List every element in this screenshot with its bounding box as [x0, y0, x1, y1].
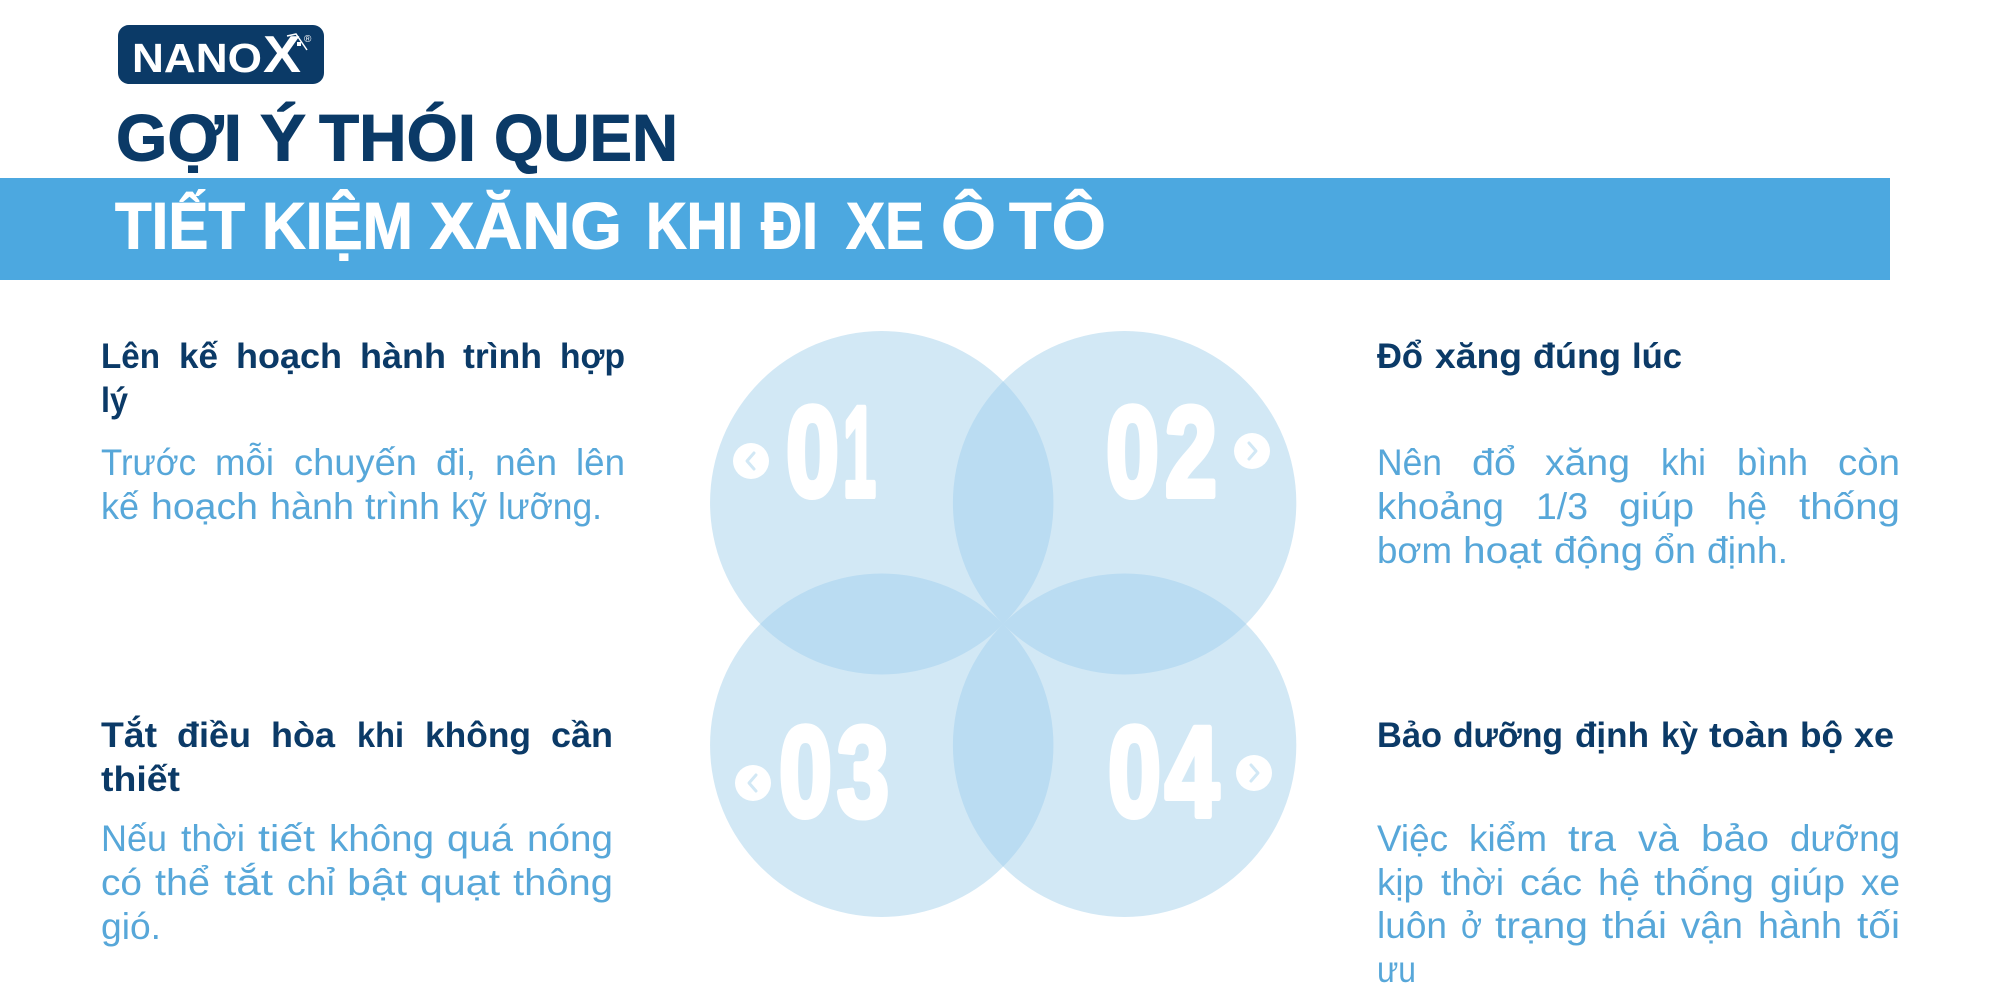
heading: tip 04: định	[1575, 716, 1649, 755]
body text: tip 02: Nên	[1377, 442, 1442, 483]
heading: tip 03	[101, 715, 613, 799]
panel: tip 03	[101, 715, 613, 947]
body text: tip 02: xăng	[1545, 442, 1630, 483]
body text: tip 04: thời	[1441, 862, 1504, 903]
title line 2: KIỆM	[262, 188, 413, 262]
body text: tip 01: mỗi	[215, 442, 274, 483]
body text: tip 04: Việc	[1377, 818, 1448, 859]
number 01: 0	[786, 381, 839, 524]
body text: tip 04: xe	[1861, 862, 1900, 903]
body text: tip 02: định.	[1707, 530, 1788, 571]
body text: tip 01: lên	[576, 442, 625, 483]
title line 2: TÔ	[1009, 188, 1106, 262]
body text: tip 03: chỉ	[287, 862, 335, 903]
number 04: 0	[1108, 701, 1161, 844]
heading: tip 04: kỳ	[1661, 716, 1699, 755]
body text: tip 04: hành	[1758, 905, 1842, 946]
heading: tip 02: đúng	[1533, 337, 1621, 376]
body text: tip 03	[101, 818, 613, 947]
body text: tip 04: ở	[1461, 905, 1482, 946]
body text: tip 04	[1377, 818, 1900, 990]
title line 2: ĐI	[761, 188, 818, 262]
heading: tip 03: thiết	[101, 760, 180, 799]
body text: tip 04: các	[1520, 862, 1582, 903]
body text: tip 03: nóng	[527, 818, 613, 859]
number 04: 4	[1165, 701, 1219, 844]
heading: tip 03: hòa	[271, 716, 336, 755]
title line 1: GỢI	[116, 100, 242, 174]
icon: left arrow 01	[733, 443, 769, 479]
body text: tip 03: quạt	[420, 862, 501, 903]
body text: tip 01: lưỡng.	[498, 486, 602, 527]
heading: tip 04: toàn	[1709, 716, 1789, 755]
body text: tip 04: thái	[1602, 905, 1667, 946]
title line 1: THÓI	[319, 100, 476, 174]
heading: tip 01	[101, 337, 625, 420]
banner	[0, 178, 1890, 280]
heading: tip 02: Đổ	[1377, 337, 1423, 376]
body text: tip 02: đổ	[1472, 442, 1516, 483]
body text: tip 04: hệ	[1598, 862, 1640, 903]
number 03	[779, 701, 889, 844]
panel: tip 02	[1377, 337, 1900, 571]
body text: tip 03: thông	[513, 862, 613, 903]
icon: left arrow 03	[735, 765, 771, 801]
number 02: 0	[1106, 381, 1159, 524]
body text: tip 04: ưu	[1377, 949, 1416, 990]
body text: tip 04: tối	[1857, 905, 1900, 946]
body text: tip 04: giúp	[1770, 862, 1845, 903]
logo: NanoX	[118, 25, 324, 84]
heading: tip 01: hành	[360, 337, 446, 376]
logo: NanoX: X	[263, 26, 301, 84]
body text: tip 04: tra	[1568, 818, 1616, 859]
body text: tip 01: Trước	[101, 442, 196, 483]
icon: right arrow 04	[1236, 755, 1272, 791]
title line 2	[115, 188, 1106, 262]
body text: tip 01: chuyến	[294, 442, 417, 483]
diagram: four overlapping circles: 1	[843, 381, 876, 524]
icon: right arrow 02	[1234, 433, 1270, 469]
body text: tip 02: hệ	[1727, 486, 1767, 527]
title line 1	[116, 100, 678, 174]
body text: tip 02: khi	[1661, 442, 1706, 483]
body text: tip 02: hoạt	[1463, 530, 1543, 571]
body text: tip 04: luôn	[1377, 905, 1447, 946]
body text: tip 02	[1377, 442, 1900, 571]
body text: tip 04: kiểm	[1469, 818, 1547, 859]
heading: tip 02: lúc	[1632, 337, 1682, 376]
body text: tip 02: bơm	[1377, 530, 1452, 571]
heading: tip 04: dưỡng	[1453, 716, 1563, 755]
heading: tip 01: kế	[179, 337, 219, 376]
body text: tip 01	[101, 442, 625, 527]
heading: tip 01: Lên	[101, 337, 160, 376]
heading: tip 04: bộ	[1800, 716, 1843, 755]
heading: tip 03: cần	[551, 716, 613, 755]
body text: tip 02: giúp	[1619, 486, 1694, 527]
heading: tip 04: xe	[1854, 716, 1894, 755]
heading: tip 01: hoạch	[236, 337, 342, 376]
body text: tip 01: trình	[365, 486, 440, 527]
body text: tip 01: kế	[101, 486, 139, 527]
title line 2: XE	[846, 188, 924, 262]
heading: tip 04	[1377, 716, 1894, 755]
heading: tip 01: lý	[101, 381, 128, 420]
number 02: 2	[1165, 381, 1217, 524]
number 02	[1106, 381, 1217, 524]
title line 1: QUEN	[494, 100, 678, 174]
title line 2: TIẾT	[115, 188, 245, 262]
body text: tip 01: kỹ	[451, 486, 487, 527]
heading: tip 02: xăng	[1435, 337, 1522, 376]
body text: tip 02: bình	[1737, 442, 1808, 483]
title line 2: KHI	[646, 188, 743, 262]
title line 1: Ý	[260, 100, 306, 174]
body text: tip 03: Nếu	[101, 818, 167, 859]
body text: tip 01: hoạch	[151, 486, 258, 527]
logo: NanoX: ®	[304, 34, 312, 45]
body text: tip 04: vận	[1681, 905, 1743, 946]
body text: tip 03: thời	[181, 818, 245, 859]
body text: tip 01: hành	[270, 486, 354, 527]
body text: tip 03: thể	[155, 862, 210, 903]
body text: tip 04: và	[1638, 818, 1679, 859]
body text: tip 03: tắt	[224, 862, 274, 903]
heading: tip 01: trình	[463, 337, 542, 376]
logo: NanoX: NANO	[132, 35, 262, 81]
body text: tip 02: 1/3	[1536, 486, 1588, 527]
heading: tip 03: không	[425, 716, 531, 755]
body text: tip 04: kịp	[1377, 862, 1424, 903]
body text: tip 02: còn	[1838, 442, 1900, 483]
heading: tip 02	[1377, 337, 1682, 376]
panel: tip 04	[1377, 716, 1900, 990]
number 03: 3	[837, 701, 889, 844]
body text: tip 04: trạng	[1495, 905, 1588, 946]
body text: tip 02: động	[1554, 530, 1643, 571]
body text: tip 03: không	[329, 818, 434, 859]
body text: tip 02: thống	[1799, 486, 1900, 527]
panel: tip 01	[101, 337, 625, 527]
heading: tip 03: Tắt	[101, 715, 157, 755]
body text: tip 01: nên	[495, 442, 557, 483]
diagram: four overlapping circles	[710, 331, 1296, 917]
body text: tip 03: có	[101, 862, 142, 903]
body text: tip 02: ổn	[1654, 530, 1696, 571]
number 03: 0	[779, 701, 832, 844]
body text: tip 03: tiết	[258, 818, 316, 859]
body text: tip 03: quá	[447, 818, 513, 859]
heading: tip 04: Bảo	[1377, 716, 1442, 755]
body text: tip 02: khoảng	[1377, 486, 1504, 527]
title line 2: Ô	[941, 188, 996, 262]
body text: tip 04: bảo	[1701, 818, 1769, 859]
heading: tip 03: khi	[357, 716, 404, 755]
body text: tip 03: gió.	[101, 906, 161, 947]
body text: tip 03: bật	[347, 862, 408, 903]
body text: tip 04: thống	[1654, 862, 1754, 903]
title line 2: XĂNG	[430, 188, 622, 262]
body text: tip 04: dưỡng	[1790, 818, 1900, 859]
body text: tip 01: đi,	[436, 442, 476, 483]
number 04	[1108, 701, 1219, 844]
heading: tip 03: điều	[177, 716, 251, 755]
heading: tip 01: hợp	[560, 337, 625, 376]
